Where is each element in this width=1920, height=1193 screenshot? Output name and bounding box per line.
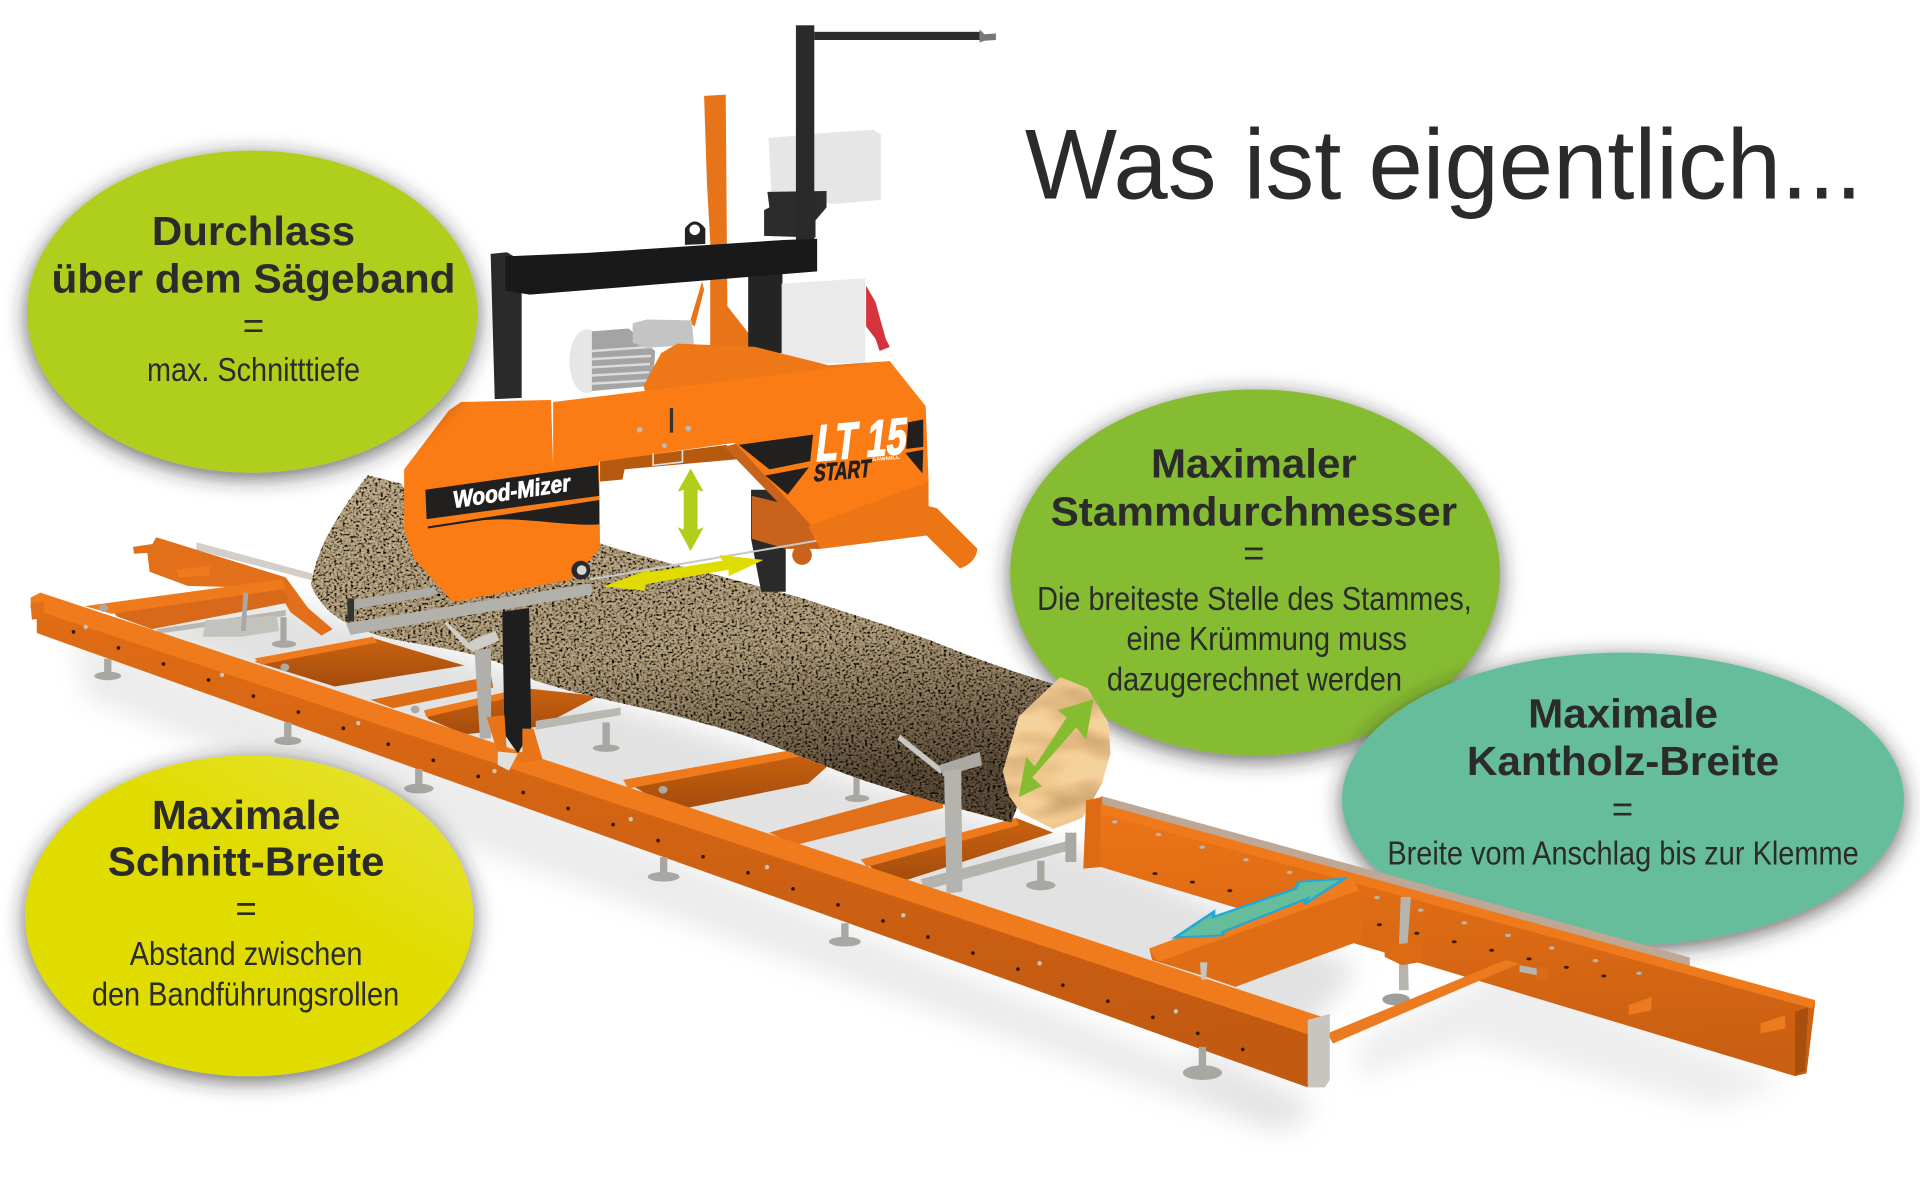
bubble description line 2: den Bandführungsrollen [92,976,399,1013]
tall mast with rod [796,25,996,270]
rail lug [133,544,154,554]
foot with bolt [1399,897,1411,990]
bracket [1385,942,1422,965]
saw band [590,541,816,580]
cross beam 5 [623,749,833,811]
bubble description: Die breiteste Stelle des Stammes, [1037,581,1472,618]
rail end plate [1308,1014,1330,1087]
rail top flange [1100,804,1815,1008]
under body band [600,445,739,482]
cross beam 1 [85,579,290,629]
band roller [571,561,590,580]
mast orange foot [487,715,542,763]
bubble description line 2: eine Krümmung muss [1127,621,1407,658]
rail web [1100,809,1815,1076]
diagonal chain arm [725,443,820,549]
bubble heading line 2: Kantholz-Breite [1467,738,1779,784]
rail lug [31,601,44,620]
water tank [769,130,881,204]
log end face [1003,677,1111,829]
arrow: clearance [678,469,704,551]
arm small clamp [444,621,499,652]
electrical box [782,278,865,363]
bubble heading: Maximale [1528,690,1718,736]
rail holes [73,632,1273,1060]
head bolts and handle [637,408,691,465]
black band with logo: Wood-Mizer [453,469,571,514]
cross beam 7 [861,818,1053,884]
black mast [502,608,531,753]
title: Was ist eigentlich... [1025,109,1862,220]
sawmill head [404,25,996,602]
cross beam 4 [424,687,598,734]
equals sign: = [1612,789,1633,830]
bubble: cant width [1342,653,1904,945]
cross beam 6 [769,793,943,845]
rod with clamp [156,593,286,637]
rear stop plate [196,542,313,580]
mast plate [498,752,518,771]
arrow: stem diameter [1019,699,1093,797]
foot bolt on beam [1200,962,1207,980]
rear column [748,269,782,353]
end post near log [1083,797,1102,869]
feet back row [272,617,1056,890]
bubble heading line 2: Schnitt-Breite [108,838,384,884]
rail top flange [31,593,1320,1036]
ground shadows [73,600,1788,1133]
cross beam 3 [371,676,493,708]
left column [491,252,522,399]
rail bolts [1115,822,1657,978]
front rail [31,593,1330,1087]
bubble: cut width [25,755,473,1076]
bubble heading: Maximaler [1151,441,1357,487]
black band with logo [425,465,599,529]
red plug [866,286,890,351]
top crossbeam [505,239,817,295]
upper drive cover [644,344,890,392]
saw head main body [553,361,929,526]
bubble description: max. Schnitttiefe [147,352,360,389]
tank bracket [764,191,827,238]
right stripes with model name: START [812,456,873,488]
front feet [94,659,1222,1080]
bubble heading line 2: über dem Sägeband [51,256,456,302]
band wheel cover left [404,400,600,602]
bubble description: Breite vom Anschlag bis zur Klemme [1387,835,1859,872]
pipe [350,587,435,610]
rod under log [536,708,621,730]
rail lugs [1629,997,1652,1015]
sawmill rear bed left [85,537,621,734]
lower mast column [751,490,786,592]
right stripes with model name: LT 15 [813,407,911,472]
bubble description: Abstand zwischen [130,936,362,973]
bubble description line 3: dazugerechnet werden [1107,662,1402,699]
chute and spout [792,482,978,569]
stop plate [1101,796,1690,973]
silver post [475,648,491,739]
rail web [37,610,1314,1087]
rear rail left section [147,537,333,636]
bubble: stem diameter [1010,389,1500,755]
orange post [704,95,759,347]
rail holes [1155,874,1637,983]
log body [311,475,1060,823]
rear rail right section [1083,796,1815,1076]
motor [569,320,694,393]
lifting eye [685,221,705,245]
cross beam with lip [1149,874,1362,987]
bubble heading: Durchlass [152,208,355,254]
equals sign: = [243,305,264,346]
rail end opening [1795,1007,1808,1075]
sawmill rear bed right [272,617,1071,890]
silver rod at clamp [921,840,1071,890]
log clamp [898,735,1076,894]
arrow: cant width [1175,879,1344,938]
cross beam 2 [254,637,464,686]
equals sign: = [235,888,257,929]
bubble heading: Maximale [152,792,340,838]
cross rod [1327,960,1520,1043]
bubble heading line 2: Stammdurchmesser [1051,488,1457,534]
arrow: cut width [603,555,763,591]
bubble: clearance [27,151,478,473]
right stripes with model name: SAWMILL [872,455,900,463]
cross beam bolts [280,664,289,671]
equals sign: = [1243,533,1265,574]
silver guide arm and mast foot [99,583,667,794]
right stripes with model name [739,407,923,495]
arm [346,583,592,635]
